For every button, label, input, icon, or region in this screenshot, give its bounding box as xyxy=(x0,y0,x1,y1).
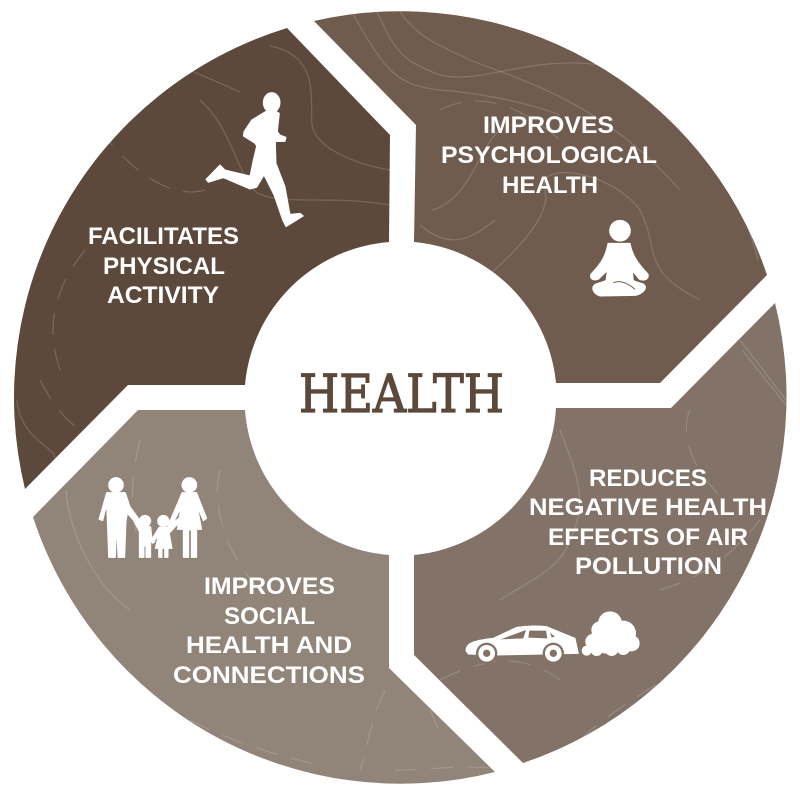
icon: family holding hands xyxy=(99,478,207,557)
label: facilitates physical activity: ACTIVITY xyxy=(107,282,219,309)
label: improves social health and connections xyxy=(173,573,365,689)
label: improves social health and connections: SOCIAL xyxy=(224,603,315,630)
label: improves social health and connections: CONNECTIONS xyxy=(173,662,365,689)
label: reduces negative health effects of air pollution: POLLUTION xyxy=(575,553,722,580)
label: facilitates physical activity: FACILITATES xyxy=(88,223,239,250)
label: facilitates physical activity: PHYSICAL xyxy=(103,253,225,280)
panel: facilitates physical activity xyxy=(14,28,390,489)
panel: improves psychological health xyxy=(314,11,767,383)
label: improves social health and connections: HEALTH AND xyxy=(186,632,352,659)
label: reduces negative health effects of air pollution: EFFECTS OF AIR xyxy=(548,524,748,551)
label: improves social health and connections: IMPROVES xyxy=(204,573,335,600)
label: reduces negative health effects of air pollution: REDUCES xyxy=(589,465,707,492)
label: improves psychological health: HEALTH xyxy=(502,172,598,199)
label: reduces negative health effects of air pollution: NEGATIVE HEALTH xyxy=(529,494,767,521)
label: reduces negative health effects of air pollution xyxy=(529,465,767,580)
label: facilitates physical activity xyxy=(88,223,239,309)
label: improves psychological health: PSYCHOLOGICAL xyxy=(441,142,657,169)
heading: HEALTH: HEALTH xyxy=(299,365,504,425)
panel: reduces negative health effects of air pollution xyxy=(414,303,787,763)
icon: meditating person xyxy=(591,220,648,296)
label: improves psychological health: IMPROVES xyxy=(483,112,614,139)
icon: runner xyxy=(206,93,303,227)
panel: improves social health and connections xyxy=(33,410,495,784)
icon: car with exhaust smoke xyxy=(466,611,640,664)
label: improves psychological health xyxy=(441,112,657,199)
